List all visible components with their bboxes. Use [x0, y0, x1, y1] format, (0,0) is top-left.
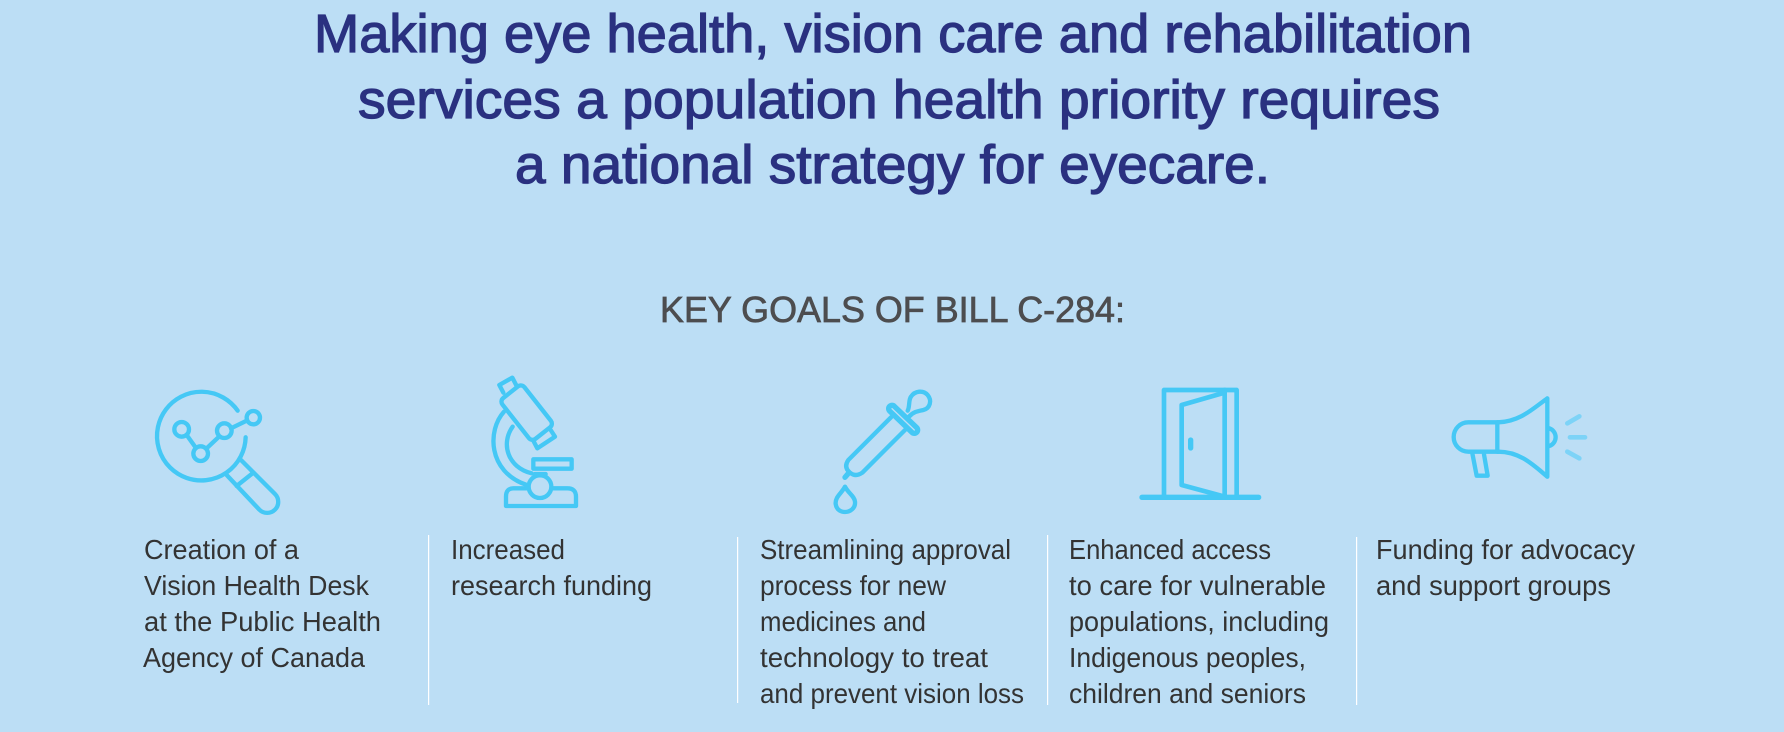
goal 2: research funding [451, 378, 652, 601]
text: goal 3 [760, 534, 1024, 709]
goal 3: streamlining approval [760, 392, 1024, 709]
text: goal 2: research funding [451, 570, 652, 601]
text: goal 2 [451, 534, 652, 601]
goal 1: vision health desk [143, 392, 381, 673]
goal 5: advocacy funding [1376, 398, 1635, 601]
title: a national strategy for eyecare. [515, 135, 1270, 195]
text: goal 3: and prevent vision loss [760, 678, 1024, 709]
title: services a population health priority requires [358, 70, 1440, 130]
icon: megaphone [1454, 398, 1585, 477]
text: goal 4: children and seniors [1069, 678, 1306, 709]
goal 4: enhanced access [1069, 390, 1329, 709]
text: goal 4: Indigenous peoples, [1069, 642, 1306, 673]
title: Making eye health, vision care and rehabilitation [314, 4, 1472, 64]
text: goal 5 [1376, 534, 1635, 601]
text: goal 5: Funding for advocacy [1376, 534, 1635, 565]
icon: open door [1142, 390, 1259, 497]
text: goal 1: at the Public Health [144, 606, 381, 637]
text: goal 3: process for new [760, 570, 946, 601]
text: goal 1: Vision Health Desk [144, 570, 369, 601]
text: goal 3: medicines and [760, 606, 926, 637]
text: goal 5: and support groups [1376, 570, 1611, 601]
text: goal 3: technology to treat [760, 642, 988, 673]
text: goal 1 [143, 534, 381, 673]
text: goal 1: Agency of Canada [143, 642, 366, 673]
icon: magnifying glass with chart [157, 392, 278, 513]
text: goal 4: populations, including [1069, 606, 1329, 637]
text: goal 4: to care for vulnerable [1069, 570, 1326, 601]
text: goal 3: Streamlining approval [760, 534, 1011, 565]
icon: microscope [493, 378, 576, 506]
heading: key goals: KEY GOALS OF BILL C-284: [660, 289, 1125, 330]
text: goal 2: Increased [451, 534, 565, 565]
text: goal 4 [1069, 534, 1329, 709]
title [314, 4, 1472, 195]
icon: eye dropper [836, 392, 930, 512]
text: goal 4: Enhanced access [1069, 534, 1271, 565]
text: goal 1: Creation of a [144, 534, 300, 565]
